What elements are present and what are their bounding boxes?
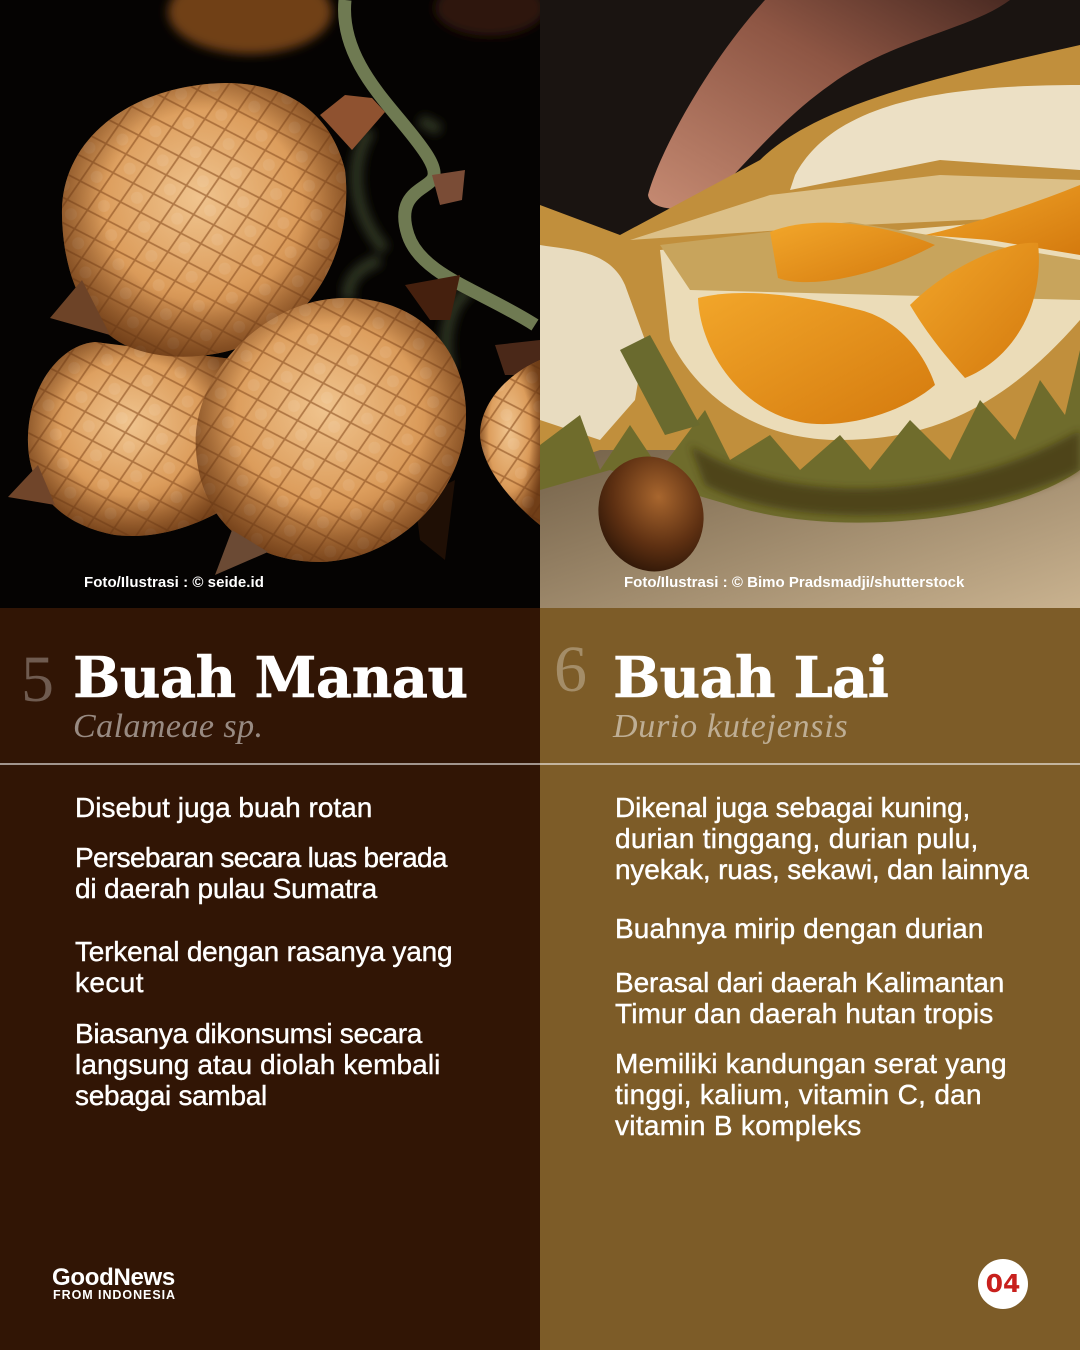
number 6: 6	[554, 633, 587, 706]
divider	[0, 763, 1080, 765]
logo: goodnews from indonesia: GoodNews	[52, 1264, 175, 1291]
text block: lai facts: nyekak, ruas, sekawi, dan lainnya	[615, 854, 1029, 885]
text block: manau facts	[75, 792, 452, 1112]
text block: lai facts: durian tinggang, durian pulu,	[615, 823, 979, 854]
text block: lai facts: vitamin B kompleks	[615, 1110, 862, 1141]
photo: manau fruit	[0, 0, 540, 608]
panel: buah manau	[0, 608, 540, 1350]
background fruits and stems	[168, 0, 545, 560]
page number badge	[978, 1259, 1028, 1309]
scientific name: calameae: Calameae sp.	[73, 708, 264, 745]
text block: manau facts: Terkenal dengan rasanya yang	[75, 936, 452, 967]
heading: buah lai: Buah Lai	[613, 645, 888, 711]
text block: manau facts: sebagai sambal	[75, 1080, 267, 1111]
photo credit: manau: Foto/Ilustrasi : © seide.id	[84, 574, 264, 591]
number 5: 5	[21, 643, 54, 716]
text block: manau facts: di daerah pulau Sumatra	[75, 873, 377, 904]
text block: lai facts: Dikenal juga sebagai kuning,	[615, 792, 970, 823]
text block: lai facts: Buahnya mirip dengan durian	[615, 913, 984, 944]
text block: lai facts: Timur dan daerah hutan tropis	[615, 998, 993, 1029]
text block: manau facts: Persebaran secara luas berada	[75, 842, 447, 873]
text block: manau facts: langsung atau diolah kembali	[75, 1049, 441, 1080]
logo: goodnews from indonesia: FROM INDONESIA	[53, 1288, 176, 1302]
shell rim	[540, 45, 1080, 500]
text block: manau facts: kecut	[75, 967, 144, 998]
text block: lai facts: tinggi, kalium, vitamin C, dan	[615, 1079, 982, 1110]
panel: buah lai	[540, 608, 1080, 1350]
text block: manau facts: Disebut juga buah rotan	[75, 792, 372, 823]
photo: lai durian	[540, 0, 1080, 608]
photo credit: lai: Foto/Ilustrasi : © Bimo Pradsmadji/shutterstock	[624, 574, 964, 591]
text block: lai facts	[614, 792, 1030, 1142]
cavity upper white	[790, 85, 1080, 190]
text block: lai facts: Memiliki kandungan serat yang	[615, 1048, 1007, 1079]
text block: lai facts: Berasal dari daerah Kalimantan	[615, 967, 1004, 998]
scientific name: durio: Durio kutejensis	[613, 708, 848, 745]
page number badge: 04	[986, 1269, 1020, 1298]
pulp	[770, 223, 935, 282]
heading: buah manau: Buah Manau	[73, 645, 468, 711]
spikes	[540, 350, 1080, 523]
text block: manau facts: Biasanya dikonsumsi secara	[75, 1018, 422, 1049]
